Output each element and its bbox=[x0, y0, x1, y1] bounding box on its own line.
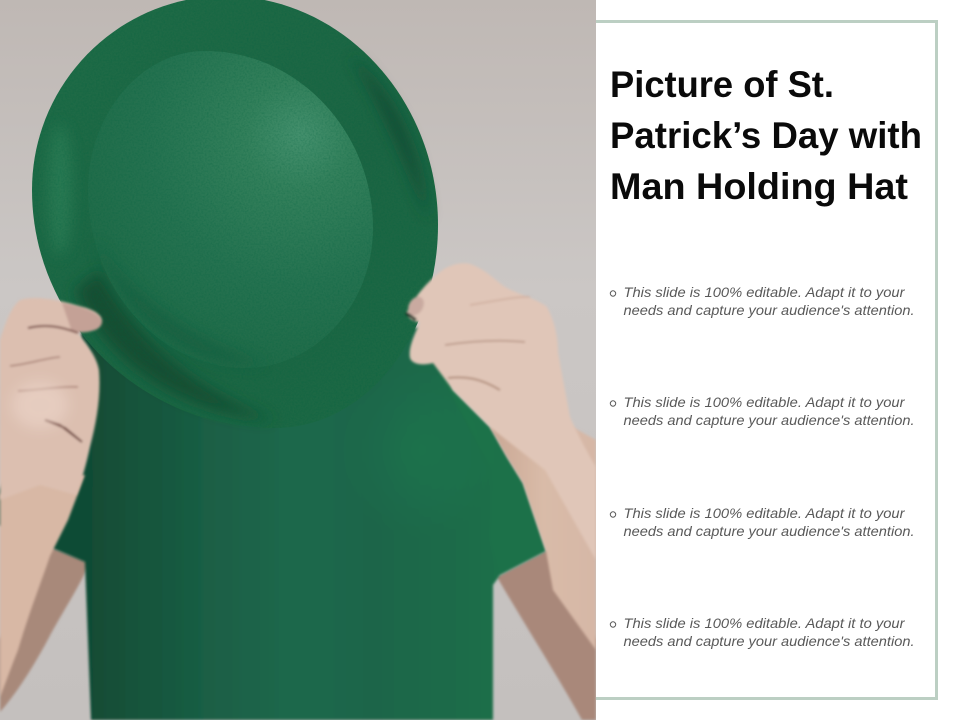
brim left highlight bbox=[48, 134, 72, 247]
pinched brim shadow bbox=[406, 313, 416, 320]
photo: man in green shirt holding hat bbox=[0, 0, 596, 720]
text block: bullet 4: This slide is 100% editable. Adapt it to your bbox=[624, 615, 906, 631]
wall background bbox=[0, 0, 596, 720]
shirt upper right highlight bbox=[411, 436, 428, 463]
text block: bullet 1: needs and capture your audience's attention. bbox=[624, 302, 914, 318]
title: Man Holding Hat bbox=[610, 166, 908, 207]
right hand bbox=[405, 263, 596, 560]
text block: bullet 1: This slide is 100% editable. Adapt it to your bbox=[624, 284, 906, 300]
text block: bullet 3: This slide is 100% editable. Adapt it to your bbox=[624, 505, 906, 521]
right finger creases bbox=[470, 297, 530, 305]
hat crown bbox=[110, 51, 373, 334]
title bbox=[610, 64, 922, 207]
right forearm bbox=[490, 420, 596, 650]
green t-shirt bbox=[0, 300, 546, 720]
bowler hat bbox=[32, 0, 438, 428]
text block: bullet 2 bbox=[610, 394, 914, 428]
hat brim bbox=[32, 0, 438, 428]
title: Picture of St. bbox=[610, 64, 834, 105]
panel: text frame bbox=[596, 22, 936, 698]
right fingernail bbox=[406, 296, 424, 316]
right sleeve bbox=[435, 362, 546, 575]
left sleeve bbox=[0, 470, 92, 527]
left thumb shade bbox=[62, 303, 102, 332]
text block: bullet 3 bbox=[610, 505, 914, 539]
brim inner shadow bbox=[360, 68, 426, 200]
text block: bullet 1 bbox=[610, 284, 914, 318]
felt texture bbox=[32, 0, 438, 428]
left forearm bbox=[0, 475, 85, 697]
brim shadow under crown bbox=[74, 272, 256, 418]
text block: bullet 4 bbox=[610, 615, 914, 649]
right upper arm bbox=[497, 548, 596, 720]
crown lower shadow bbox=[136, 300, 210, 350]
left finger creases bbox=[28, 326, 78, 333]
text block: bullet 2: needs and capture your audience's attention. bbox=[624, 412, 914, 428]
text block: bullet 2: This slide is 100% editable. Adapt it to your bbox=[624, 394, 906, 410]
text block: bullet 4: needs and capture your audience's attention. bbox=[624, 633, 914, 649]
left upper arm behind forearm bbox=[0, 545, 90, 712]
text block: bullet 3: needs and capture your audience's attention. bbox=[624, 523, 914, 539]
left knuckle highlight bbox=[12, 381, 68, 429]
title: Patrick’s Day with bbox=[610, 115, 922, 156]
left hand bbox=[0, 298, 102, 500]
